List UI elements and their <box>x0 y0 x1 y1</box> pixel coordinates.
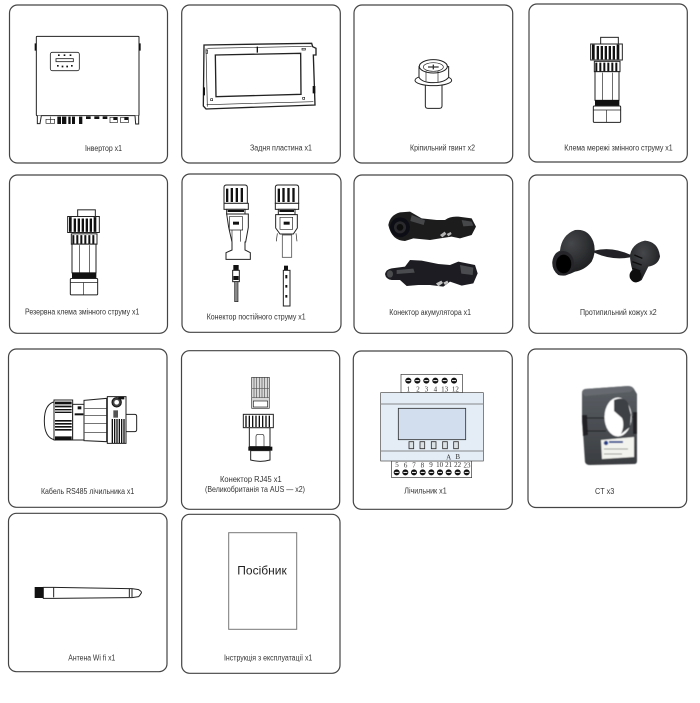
label: dust cover: Протипильний кожух x2 <box>580 308 657 317</box>
icon: RJ45 connector <box>243 377 273 461</box>
card: inverter <box>10 5 168 163</box>
icon: meter: 12 <box>452 385 459 393</box>
label: CT: CT x3 <box>595 487 615 496</box>
icon: back plate <box>203 43 316 109</box>
card: user manual <box>182 514 340 673</box>
card: battery connector <box>354 175 513 333</box>
label: DC connector: Конектор постійного струму x1 <box>207 312 306 321</box>
icon: DC connectors <box>224 185 299 306</box>
icon: backup AC terminal <box>68 210 99 295</box>
label: RS485 meter cable: Кабель RS485 лічильника x1 <box>41 487 135 496</box>
icon: inverter <box>35 36 141 124</box>
card: DC connector <box>182 174 341 332</box>
card: mounting screw <box>354 5 513 163</box>
icon: antenna <box>35 587 141 598</box>
icon: meter: 23 <box>464 461 471 469</box>
label: inverter: Інвертор x1 <box>85 144 122 153</box>
icon: meter: 7 <box>412 461 416 469</box>
icon: meter <box>381 374 483 478</box>
label: manual: Інструкція з експлуатації x1 <box>224 653 313 662</box>
text: manual title: Посібник <box>237 563 287 577</box>
icon: meter: 21 <box>445 461 453 469</box>
label: mounting screw: Кріпильний гвинт x2 <box>410 144 475 152</box>
icon: battery connectors photo <box>385 212 478 287</box>
card: Wi-Fi antenna <box>8 513 167 672</box>
label: meter: Лічильник x1 <box>404 487 447 496</box>
icon: meter: 13 <box>441 385 449 393</box>
label: battery connector: Конектор акумулятора x1 <box>389 308 471 317</box>
icon: meter: A <box>446 454 451 462</box>
icon: meter: 8 <box>421 461 425 469</box>
card: RJ45 connector <box>182 351 340 509</box>
icon: meter: 2 <box>416 385 420 393</box>
icon: dust cover photo <box>552 230 660 282</box>
card: dust cover <box>529 175 687 333</box>
label: AC grid terminal: Клема мережі змінного струму x1 <box>564 144 673 152</box>
icon: CT clamp photo <box>582 386 637 465</box>
card: CT <box>528 349 687 508</box>
label: RJ45 connector: Конектор RJ45 x1 <box>220 475 282 484</box>
card: meter <box>353 351 512 509</box>
icon: meter: 4 <box>434 385 438 393</box>
card: back plate <box>182 5 340 163</box>
icon: meter: 22 <box>454 461 462 469</box>
card: RS485 meter cable <box>8 349 167 507</box>
icon: mounting screw <box>415 60 452 108</box>
label: antenna: Антена Wi fi x1 <box>68 653 116 662</box>
icon: RS485 cable connector <box>44 397 137 443</box>
card: AC grid terminal <box>529 4 687 162</box>
icon: meter: B <box>455 453 460 461</box>
icon: meter: 10 <box>436 461 444 469</box>
label: backup AC terminal: Резервна клема змінного струму x1 <box>25 308 140 316</box>
label: back plate: Задня пластина x1 <box>250 144 312 152</box>
icon: meter: 1 <box>407 385 411 393</box>
icon: meter: 3 <box>425 385 429 393</box>
icon: AC grid terminal <box>591 37 622 122</box>
icon: meter: 6 <box>404 461 408 469</box>
icon: manual booklet <box>229 533 297 629</box>
icon: meter: 5 <box>395 461 399 469</box>
card: backup AC terminal <box>10 175 168 333</box>
icon: meter: 9 <box>429 461 433 469</box>
label: RJ45 regional note: (Великобританія та AUS — x2) <box>205 485 305 494</box>
